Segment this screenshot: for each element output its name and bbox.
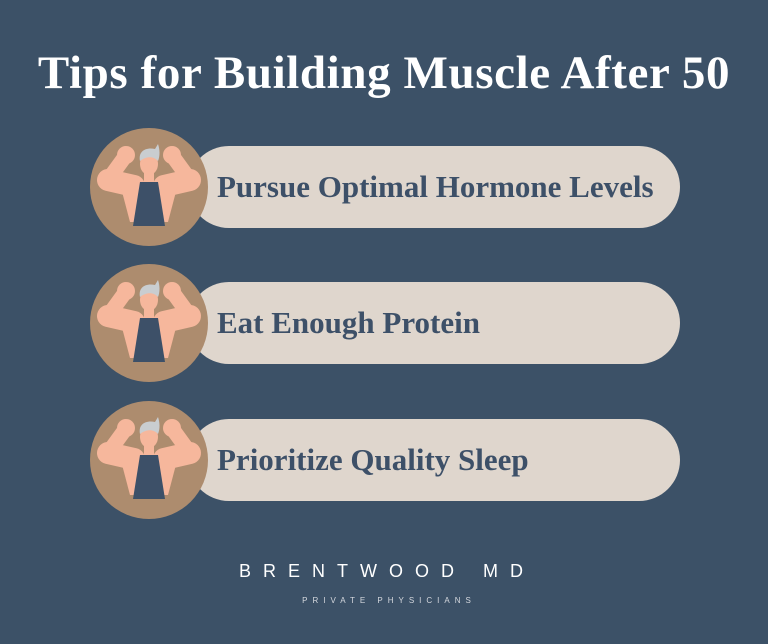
pill 1 bbox=[188, 146, 680, 228]
icon: flexing man bbox=[90, 264, 208, 382]
icon: flexing man bbox=[90, 128, 208, 246]
pill 1: Pursue Optimal Hormone Levels bbox=[217, 169, 654, 204]
pill 3 bbox=[188, 419, 680, 501]
row 2 bbox=[90, 264, 680, 382]
row 3 bbox=[90, 401, 680, 519]
pill 2 bbox=[188, 282, 680, 364]
pill 2: Eat Enough Protein bbox=[217, 305, 480, 340]
pill 3: Prioritize Quality Sleep bbox=[217, 442, 529, 477]
row 1 bbox=[90, 128, 680, 246]
brand tagline: PRIVATE PHYSICIANS bbox=[302, 596, 476, 605]
title: Tips for Building Muscle After 50 bbox=[38, 47, 730, 99]
icon: flexing man bbox=[90, 401, 208, 519]
brand name: BRENTWOOD MD bbox=[239, 561, 535, 581]
